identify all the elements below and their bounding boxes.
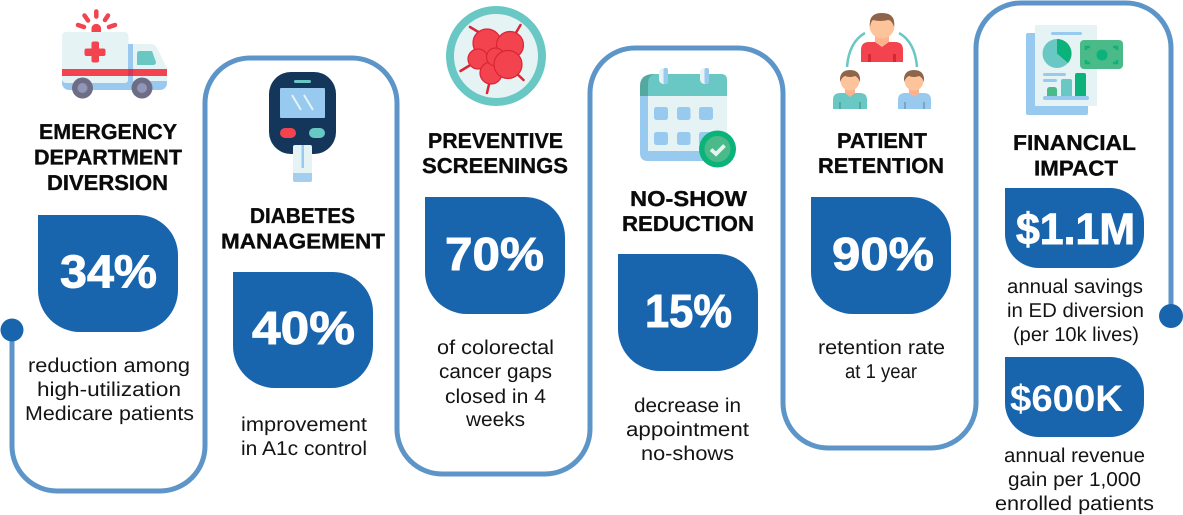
stat badge: $1.1M xyxy=(1005,188,1144,268)
panel: preventive screenings xyxy=(422,10,568,431)
description: weeks xyxy=(465,409,525,431)
heading: NO-SHOW xyxy=(630,187,748,211)
end dot xyxy=(1159,304,1183,328)
description: Medicare patients xyxy=(25,403,194,425)
description: retention rate xyxy=(818,337,945,359)
stat badge: $600K xyxy=(1005,357,1144,437)
heading: FINANCIAL xyxy=(1013,131,1136,155)
stat badge: $600K: $600K xyxy=(1010,378,1123,419)
icon: patient group xyxy=(833,13,931,109)
description: closed in 4 xyxy=(445,386,546,408)
heading xyxy=(622,187,754,236)
description: appointment xyxy=(626,419,749,441)
description: revenue: annual revenue xyxy=(1004,445,1145,467)
description: improvement xyxy=(241,414,367,436)
panel: diabetes management xyxy=(221,72,385,460)
description: at 1 year xyxy=(845,361,917,383)
description: savings: annual savings xyxy=(1007,276,1143,298)
heading: DIABETES xyxy=(250,204,355,228)
stat badge: 34%: 34% xyxy=(60,246,157,298)
stat badge: 90% xyxy=(811,197,951,314)
stat badge: 70% xyxy=(425,197,565,314)
heading xyxy=(422,129,568,178)
heading: RETENTION xyxy=(818,154,944,178)
stat badge: 34% xyxy=(38,215,178,332)
panel: emergency department diversion xyxy=(25,12,194,425)
stat badge: $1.1M: $1.1M xyxy=(1016,205,1135,254)
panel: no-show reduction xyxy=(618,68,758,465)
panel: financial impact xyxy=(995,25,1154,515)
stat badge: 90%: 90% xyxy=(832,228,934,280)
stat badge: 15% xyxy=(618,254,758,371)
heading: DEPARTMENT xyxy=(34,146,182,170)
description xyxy=(437,337,554,431)
icon: ambulance xyxy=(62,12,167,98)
heading: EMERGENCY xyxy=(39,120,177,144)
description: of colorectal xyxy=(437,337,554,359)
description xyxy=(241,414,367,460)
description xyxy=(818,337,945,383)
description: decrease in xyxy=(634,395,741,417)
description: revenue: gain per 1,000 xyxy=(1008,469,1141,491)
description: reduction among xyxy=(28,355,190,377)
description: cancer gaps xyxy=(439,361,552,383)
heading: MANAGEMENT xyxy=(221,230,385,254)
heading xyxy=(221,204,385,254)
heading: REDUCTION xyxy=(622,212,754,236)
description: revenue xyxy=(995,445,1154,515)
start dot xyxy=(0,318,24,342)
heading: IMPACT xyxy=(1034,156,1118,180)
icon: financial report xyxy=(1026,25,1123,115)
heading: DIVERSION xyxy=(47,171,168,195)
stat badge: 15%: 15% xyxy=(645,285,732,337)
stat badge: 40% xyxy=(233,272,373,388)
icon: glucose meter xyxy=(269,72,336,182)
heading xyxy=(1013,131,1136,180)
stat badge: 40%: 40% xyxy=(252,302,355,354)
description: savings xyxy=(1007,276,1144,346)
heading xyxy=(34,120,182,195)
stat badge: 70%: 70% xyxy=(445,228,544,280)
heading xyxy=(818,129,944,178)
heading: PATIENT xyxy=(837,129,927,153)
description: revenue: enrolled patients xyxy=(995,493,1154,515)
description: in A1c control xyxy=(241,438,367,460)
description xyxy=(626,395,749,465)
icon: cell cluster xyxy=(450,10,542,102)
panel: patient retention xyxy=(811,13,951,383)
heading: PREVENTIVE xyxy=(428,129,563,153)
description: high-utilization xyxy=(37,379,181,401)
heading: SCREENINGS xyxy=(422,154,568,178)
description: no-shows xyxy=(641,443,734,465)
description: savings: (per 10k lives) xyxy=(1013,324,1139,346)
description: savings: in ED diversion xyxy=(1007,300,1144,322)
description xyxy=(25,355,194,425)
icon: calendar with check xyxy=(640,68,736,168)
